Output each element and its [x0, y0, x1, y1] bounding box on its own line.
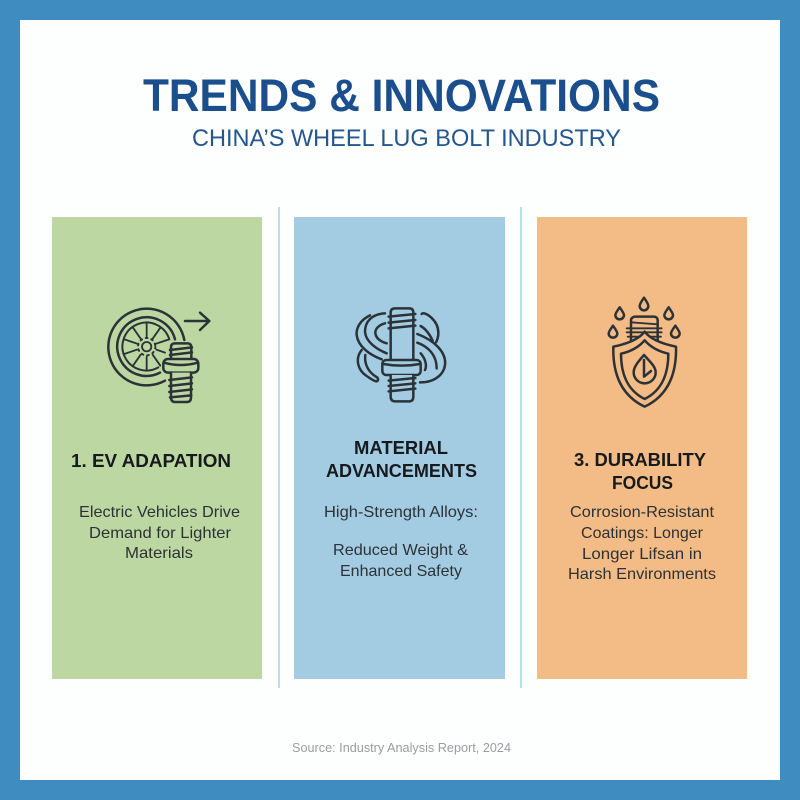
text: material advancements body: Reduced Weight &: [333, 542, 468, 559]
heading: durability focus: 3. DURABILITY: [574, 449, 707, 470]
text: EV adaptation body: [79, 504, 240, 562]
title: TRENDS & INNOVATIONS: [143, 70, 660, 121]
heading: material advancements: MATERIAL: [354, 437, 448, 458]
heading: material advancements: [326, 437, 477, 481]
panel: durability focus: [537, 217, 747, 679]
icon: shield with water drops over bolt: [609, 298, 680, 407]
text: durability focus body: Harsh Environments: [568, 566, 716, 583]
text: EV adaptation body: Demand for Lighter: [89, 525, 232, 542]
text: durability focus body: Corrosion-Resistant: [570, 504, 715, 521]
text: EV adaptation body: Materials: [125, 545, 193, 562]
panel: material advancements: [294, 217, 505, 679]
heading: material advancements: ADVANCEMENTS: [326, 460, 477, 481]
text: material advancements body: [324, 504, 478, 580]
text: durability focus body: Coatings: Longer: [581, 525, 704, 542]
subtitle: CHINA’S WHEEL LUG BOLT INDUSTRY: [192, 125, 621, 152]
text: durability focus body: [568, 504, 716, 583]
heading: durability focus: FOCUS: [612, 472, 673, 493]
text: durability focus body: Longer Lifsan in: [582, 546, 702, 563]
text: material advancements body: Enhanced Safety: [340, 563, 462, 580]
panel: EV adaptation: [52, 217, 262, 679]
text: EV adaptation body: Electric Vehicles Drive: [79, 504, 240, 521]
heading: EV adaptation: 1. EV ADAPATION: [71, 450, 231, 471]
icon: wheel with lug bolt and arrow: [108, 309, 209, 402]
source note: Source: Industry Analysis Report, 2024: [292, 741, 511, 755]
text: material advancements body: High-Strength Alloys:: [324, 504, 478, 521]
icon: bolt with swirling alloy bands: [357, 308, 445, 401]
heading: durability focus: [574, 449, 707, 493]
